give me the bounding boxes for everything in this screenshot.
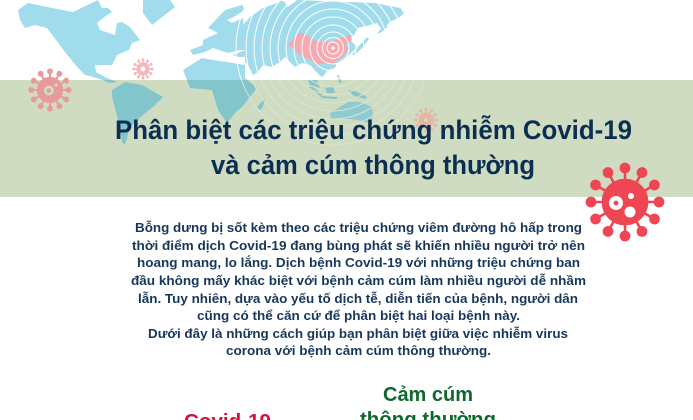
rings centre dot [331, 46, 335, 50]
concentric rings [236, 0, 430, 145]
column heading: flu: Cảm cúm [383, 384, 473, 406]
map: Java [320, 96, 337, 99]
intro text [131, 220, 586, 358]
heading: Phân biệt các triệu chứng nhiễm Covid-19 [115, 114, 632, 145]
map: New Guinea [348, 90, 367, 99]
map: Africa [183, 58, 257, 123]
intro text: corona với bệnh cảm cúm thông thường. [226, 343, 491, 358]
map: Australia [330, 102, 373, 123]
intro text: lẫn. Tuy nhiên, dựa vào yếu tố dịch tễ, diễn tiến của bệnh, người dân [138, 291, 578, 306]
intro text: hoang mang, lo lắng. Dịch bệnh Covid-19 với những triệu chứng ban [137, 255, 580, 270]
title band [0, 80, 693, 197]
intro text: cũng có thể căn cứ để phân biệt hai loại bệnh này. [197, 308, 520, 323]
map: Madagascar [257, 98, 265, 110]
map: Europe [190, 5, 245, 55]
icon: small virus left [28, 68, 72, 112]
world map [18, 0, 430, 145]
map: Japan [352, 37, 369, 55]
heading [115, 114, 632, 180]
heading: và cảm cúm thông thường [211, 150, 535, 180]
map: Indochina [308, 80, 320, 88]
map: Sumatra [309, 87, 323, 96]
map: North America [18, 0, 140, 83]
map: Philippines [337, 75, 342, 83]
icon: faded virus behind title [414, 108, 438, 132]
intro text: đầu không mấy khác biệt với bệnh cảm cúm làm nhiều người dễ nhầm [131, 273, 586, 288]
intro text: thời điểm dịch Covid-19 đang bùng phát sẽ khiến nhiều người trở nên [132, 238, 585, 253]
icon: large red virus [586, 163, 664, 241]
map: Turkey [233, 50, 245, 57]
map: Greenland [143, 0, 175, 25]
map: Asia [243, 0, 405, 78]
map: China highlighted [288, 33, 352, 65]
icon: small virus centre [132, 58, 154, 80]
map: Kamchatka [376, 25, 388, 34]
intro text: Bỗng dưng bị sốt kèm theo các triệu chứng viêm đường hô hấp trong [135, 220, 582, 235]
map: Borneo [325, 86, 335, 93]
map: South America [112, 82, 163, 145]
intro text: Dưới đây là những cách giúp bạn phân biệt giữa việc nhiễm virus [148, 326, 568, 341]
column heading: flu [360, 384, 496, 420]
